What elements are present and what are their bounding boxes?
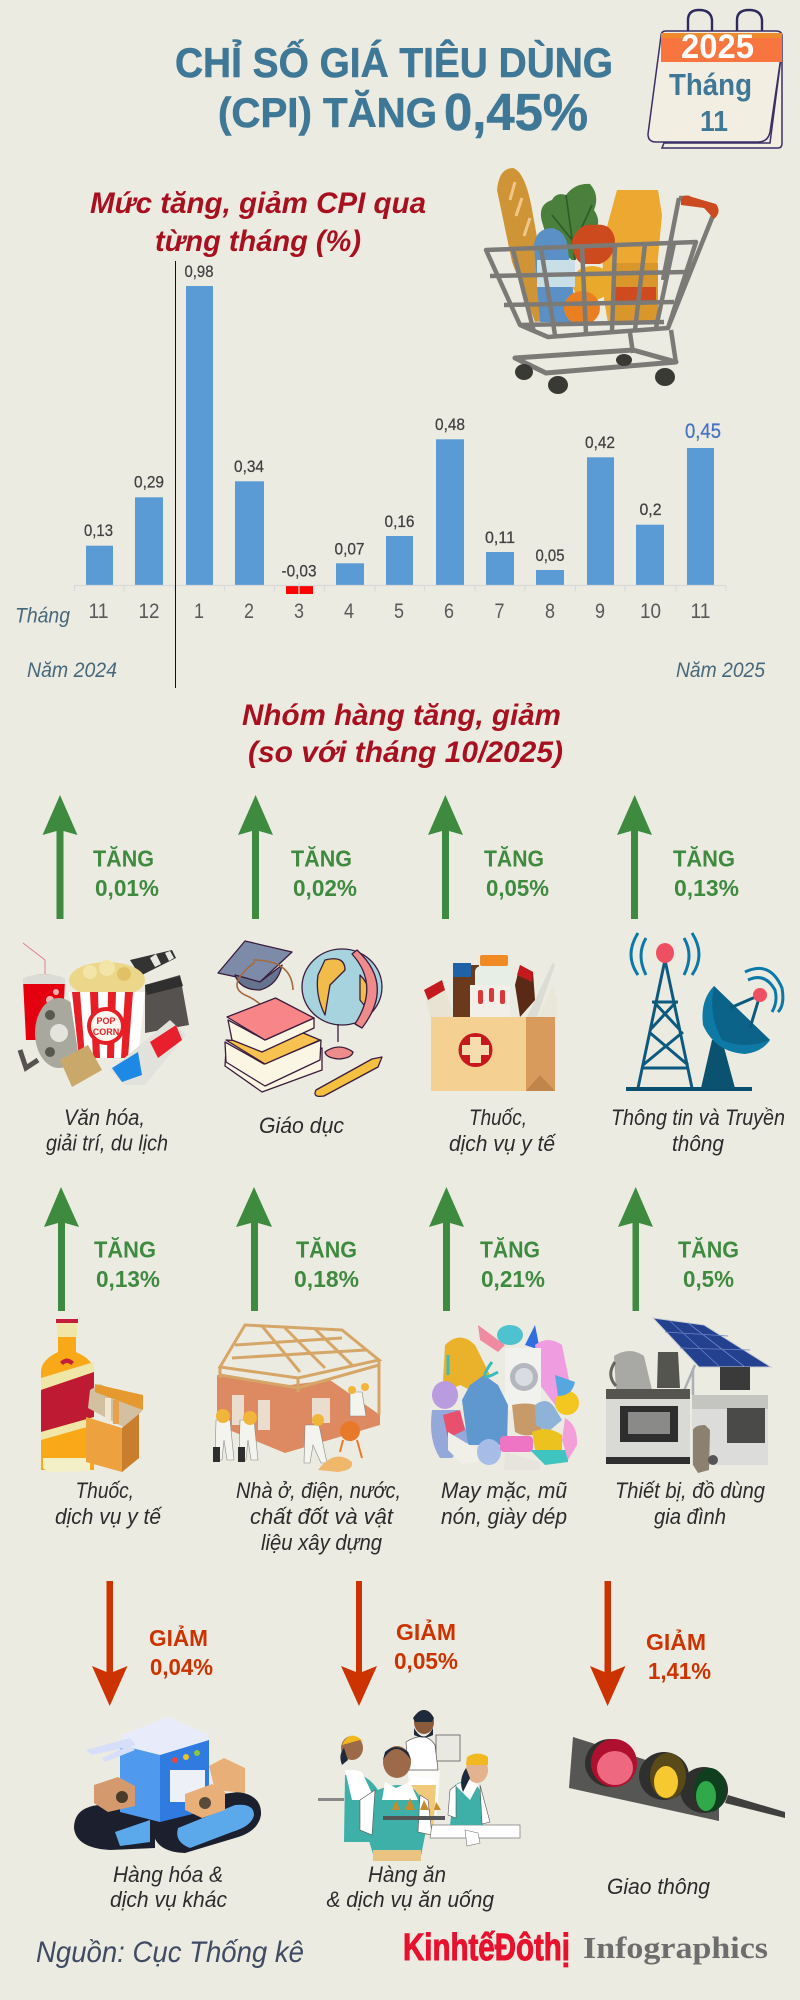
title <box>175 38 613 142</box>
icon: popcorn, film and tickets: CORN <box>93 1027 119 1037</box>
icon: pile of clothes <box>431 1325 579 1470</box>
change value: GIẢM <box>396 1617 456 1645</box>
arrow up <box>617 795 652 919</box>
label <box>611 1105 785 1156</box>
change value <box>291 845 357 901</box>
change value: 0,5% <box>683 1266 734 1292</box>
label: Giao thông <box>607 1874 711 1899</box>
panel: household appliances <box>606 1187 771 1529</box>
title: CHỈ SỐ GIÁ TIÊU DÙNG <box>175 38 613 86</box>
icon: popcorn, film and tickets: POP <box>96 1016 116 1026</box>
change value <box>484 845 549 901</box>
icon: traffic light <box>569 1737 785 1821</box>
label <box>615 1478 766 1529</box>
label: Nhà ở, điện, nước, <box>236 1478 401 1503</box>
year label 2024: Năm 2024 <box>27 659 117 682</box>
icon: appliances and solar panel <box>606 1318 771 1473</box>
heading: monthly CPI change: từng tháng (%) <box>155 225 361 258</box>
label <box>441 1478 567 1529</box>
change value: GIẢM <box>149 1623 208 1651</box>
month labels: 6 <box>444 600 454 623</box>
change value: 0,05% <box>486 875 549 901</box>
change value <box>480 1236 545 1292</box>
label: Hàng hóa & <box>113 1862 223 1887</box>
change value <box>394 1617 458 1674</box>
change value: TĂNG <box>296 1236 357 1263</box>
arrow up <box>428 795 463 919</box>
value labels: -0,03 <box>282 562 316 581</box>
change value: 0,02% <box>293 875 357 901</box>
panel: information and communications <box>611 795 785 1156</box>
arrow down <box>341 1581 377 1706</box>
label: giải trí, du lịch <box>46 1131 168 1156</box>
change value: 0,18% <box>294 1266 359 1292</box>
panel: medicine and health services <box>424 795 557 1156</box>
change value: 0,21% <box>481 1266 545 1292</box>
change value: 1,41% <box>648 1658 711 1684</box>
month labels: 2 <box>244 600 254 623</box>
change value: 0,13% <box>96 1266 160 1292</box>
panel: catering services <box>318 1581 520 1912</box>
value labels: 0,48 <box>435 415 465 434</box>
icon: medicine bag <box>424 955 557 1091</box>
value labels: 0,34 <box>234 457 264 476</box>
change value: 0,13% <box>674 875 739 901</box>
label: dịch vụ khác <box>110 1887 227 1912</box>
change value <box>294 1236 359 1292</box>
value labels: 0,2 <box>640 500 662 519</box>
month labels <box>88 600 710 623</box>
label: Văn hóa, <box>64 1105 145 1130</box>
arrow down <box>590 1581 626 1706</box>
panel: alcohol and tobacco <box>41 1187 163 1529</box>
icon: calendar, month 11 of 2025 <box>648 10 782 148</box>
month labels: 4 <box>344 600 354 623</box>
label <box>236 1478 401 1555</box>
icon: restaurant staff <box>318 1710 520 1861</box>
value labels: 0,98 <box>184 262 214 281</box>
source note: Nguồn: Cục Thống kê <box>36 1936 304 1969</box>
change value <box>149 1623 213 1680</box>
label <box>326 1862 495 1912</box>
bar chart: monthly CPI <box>74 262 726 623</box>
arrow up <box>236 1187 272 1311</box>
change value <box>93 845 159 901</box>
value labels: 0,07 <box>334 540 364 559</box>
icon: popcorn, film and tickets <box>20 943 189 1087</box>
panel: culture, entertainment, tourism <box>20 795 189 1156</box>
arrow down <box>92 1581 128 1706</box>
label: Thuốc, <box>76 1478 134 1503</box>
icon: packaging machine on conveyor <box>74 1717 261 1853</box>
label: Thông tin và Truyền <box>611 1105 785 1130</box>
month labels: 3 <box>294 600 304 623</box>
month labels: 12 <box>138 600 160 623</box>
change value: TĂNG <box>291 845 352 872</box>
axis title: month: Tháng <box>15 605 70 628</box>
panel: other goods and services <box>74 1581 261 1912</box>
arrow up <box>44 1187 79 1311</box>
change value: TĂNG <box>678 1236 739 1263</box>
label <box>55 1478 163 1529</box>
value labels: 0,16 <box>384 512 414 531</box>
year label 2025: Năm 2025 <box>676 659 765 682</box>
value labels: 0,11 <box>485 528 515 547</box>
title: (CPI) TĂNG <box>218 89 437 136</box>
label: thông <box>672 1131 725 1156</box>
label <box>46 1105 168 1156</box>
label: Thuốc, <box>469 1105 527 1130</box>
negative bar, March <box>286 586 313 594</box>
panel: transport <box>569 1581 785 1899</box>
icon: books, globe, graduation cap <box>218 941 382 1096</box>
icon: bottle and cigarette pack <box>41 1319 143 1472</box>
change value <box>94 1236 160 1292</box>
label: nón, giày dép <box>441 1504 567 1529</box>
icon: shopping cart with groceries <box>486 168 719 394</box>
value labels: 0,42 <box>585 433 615 452</box>
change value: 0,04% <box>150 1654 213 1680</box>
heading: goods groups: Nhóm hàng tăng, giảm <box>242 699 561 732</box>
arrow up <box>42 795 78 919</box>
logo: Kinh tế & Đô thị Infographics <box>403 1927 768 1969</box>
label: Hàng ăn <box>368 1862 446 1887</box>
month labels: 9 <box>595 600 605 623</box>
label: May mặc, mũ <box>441 1478 567 1503</box>
month labels: 10 <box>640 600 661 623</box>
change value: TĂNG <box>94 1236 156 1263</box>
arrow up <box>238 795 273 919</box>
change value: TĂNG <box>484 845 544 872</box>
icon: house under construction <box>213 1325 380 1472</box>
title: 0,45% <box>444 84 588 142</box>
change value <box>673 845 739 901</box>
change value: TĂNG <box>93 845 154 872</box>
label: chất đốt và vật <box>250 1504 394 1529</box>
value labels: 0,45 <box>685 420 721 443</box>
label: Giáo dục <box>259 1113 344 1138</box>
icon: calendar, month 11 of 2025: 2025 <box>681 28 754 66</box>
label: dịch vụ y tế <box>449 1131 557 1156</box>
label <box>449 1105 557 1156</box>
panel: education <box>218 795 382 1138</box>
label: Thiết bị, đồ dùng <box>615 1478 766 1503</box>
heading: monthly CPI change <box>90 187 426 258</box>
icon: calendar, month 11 of 2025: 11 <box>700 106 728 138</box>
month labels: 1 <box>194 600 204 623</box>
value labels: 0,05 <box>536 546 564 565</box>
panel: housing, electricity, water, fuel, building materials <box>213 1187 401 1555</box>
icon: antenna tower and satellite dish <box>626 933 783 1091</box>
chart bars <box>86 286 714 585</box>
logo: Kinh tế & Đô thị Infographics: Infographics <box>583 1930 768 1965</box>
arrow up <box>618 1187 653 1311</box>
change value <box>678 1236 739 1292</box>
change value: TĂNG <box>480 1236 540 1263</box>
change value: GIẢM <box>646 1627 706 1655</box>
label: liệu xây dựng <box>261 1530 383 1555</box>
heading: goods groups: (so với tháng 10/2025) <box>248 736 563 769</box>
logo: Kinh tế & Đô thị Infographics: KinhtếĐôthị <box>403 1927 570 1969</box>
chart axis <box>74 582 726 594</box>
icon: calendar, month 11 of 2025: Tháng <box>669 67 752 102</box>
change value: 0,05% <box>394 1648 458 1674</box>
label: & dịch vụ ăn uống <box>326 1887 495 1912</box>
heading: monthly CPI change: Mức tăng, giảm CPI qua <box>90 187 426 220</box>
month labels: 7 <box>494 600 504 623</box>
value labels <box>84 262 721 581</box>
month labels: 11 <box>88 600 108 623</box>
change value: 0,01% <box>95 875 159 901</box>
label: dịch vụ y tế <box>55 1504 163 1529</box>
month labels: 11 <box>690 600 710 623</box>
arrow up <box>429 1187 464 1311</box>
month labels: 5 <box>394 600 404 623</box>
panel: garments, hats, footwear <box>429 1187 579 1529</box>
label <box>110 1862 227 1912</box>
value labels: 0,29 <box>134 473 164 492</box>
heading: goods groups <box>242 699 563 769</box>
change value <box>646 1627 711 1684</box>
label: gia đình <box>654 1504 726 1529</box>
value labels: 0,13 <box>84 521 113 540</box>
change value: TĂNG <box>673 845 735 872</box>
year divider line <box>175 261 176 688</box>
month labels: 8 <box>545 600 555 623</box>
